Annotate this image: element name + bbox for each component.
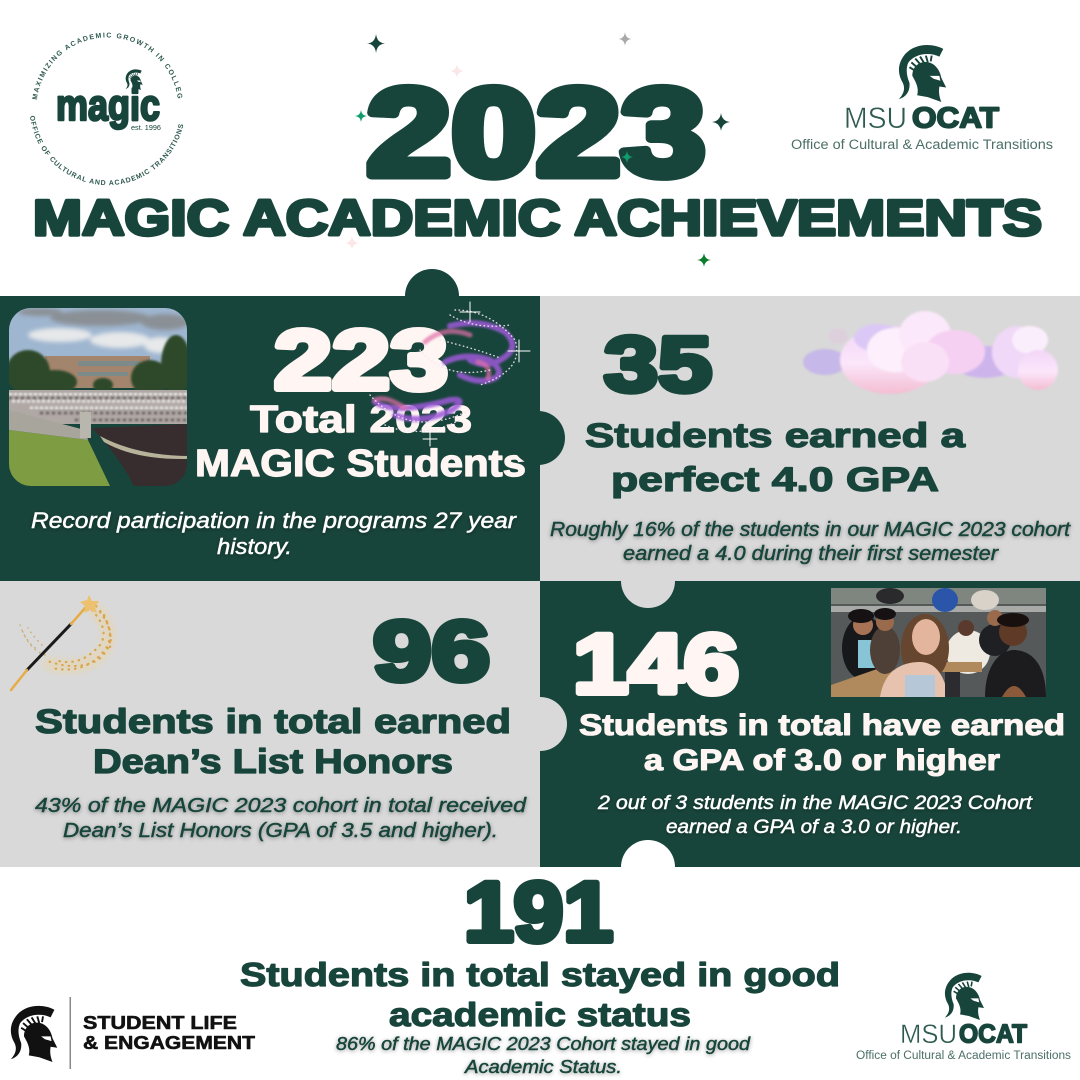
wordmark line 1: STUDENT LIFE (83, 1012, 237, 1033)
panel background (540, 296, 1080, 581)
photo: group of students (6, 308, 191, 486)
small sparkle over the year (621, 151, 633, 163)
heading line 1: Students earned a (585, 417, 966, 455)
MSU OCAT logo bottom (856, 973, 1071, 1062)
title: MAGIC ACADEMIC ACHIEVEMENTS (33, 190, 1042, 246)
panel body text: Record participation in the programs 27 year (31, 508, 518, 533)
section: 191 good academic status (240, 865, 840, 1077)
panel background (540, 581, 1080, 867)
MSU wordmark: MSU (844, 102, 907, 135)
big number 146: 146 (573, 617, 739, 711)
helmet icon (945, 973, 984, 1020)
cloud illustration (803, 311, 1058, 394)
puzzle notches (540, 581, 675, 867)
big number 96: 96 (373, 604, 490, 698)
panel background (0, 581, 540, 867)
logo helmet (126, 69, 143, 90)
panel: 223 total students (0, 269, 540, 581)
OCAT wordmark: OCAT (959, 1018, 1027, 1048)
wordmark line 2: & ENGAGEMENT (83, 1032, 256, 1053)
panel body text (550, 519, 1072, 565)
heading line 1: Students in total have earned (579, 709, 1065, 742)
heading line 1: Students in total earned (35, 703, 511, 741)
panel body text (597, 792, 1034, 838)
wand star (80, 595, 99, 613)
panel body text: Roughly 16% of the students in our MAGIC 2023 cohort (550, 519, 1072, 541)
body text: 86% of the MAGIC 2023 Cohort stayed in good (336, 1034, 751, 1054)
MAGIC circular logo (30, 32, 184, 186)
magic wordmark: magic (56, 81, 160, 130)
panel body text: Dean’s List Honors (GPA of 3.5 and higher). (63, 819, 498, 842)
helmet icon (11, 1006, 57, 1062)
MSU OCAT logo top (791, 45, 1053, 152)
heading line 1: Students in total stayed in good (240, 956, 840, 993)
panel: 35 perfect GPA (511, 296, 1080, 581)
panel body text: 2 out of 3 students in the MAGIC 2023 Cohort (597, 792, 1034, 814)
photo: seated students (831, 588, 1046, 697)
panel body text (31, 508, 518, 559)
Student Life and Engagement logo (11, 997, 256, 1069)
logo ring text bottom: OFFICE OF CULTURAL AND ACADEMIC TRANSITIONS (30, 116, 184, 186)
body text (336, 1034, 751, 1077)
panel body text: history. (217, 534, 292, 559)
big number 223: 223 (274, 313, 448, 407)
magic swirl (370, 302, 530, 446)
panel: 96 Dean's List (0, 581, 540, 867)
big number 191: 191 (464, 865, 613, 959)
OCAT wordmark: OCAT (912, 102, 999, 134)
office caption: Office of Cultural & Academic Transitions (791, 137, 1053, 152)
panel body text (35, 794, 527, 842)
body text: Academic Status. (464, 1057, 622, 1077)
magic wand illustration (11, 606, 111, 690)
panel body text: 43% of the MAGIC 2023 cohort in total received (35, 794, 527, 817)
heading line 2: a GPA of 3.0 or higher (644, 744, 1000, 777)
MSU wordmark: MSU (900, 1019, 957, 1049)
panel body text: earned a GPA of a 3.0 or higher. (666, 816, 962, 838)
title year: 2023 (366, 64, 706, 202)
heading line 2: Dean’s List Honors (93, 743, 453, 781)
heading line 2: academic status (389, 996, 691, 1033)
heading line 2: MAGIC Students (195, 443, 526, 485)
big number 35: 35 (604, 320, 712, 408)
helmet icon (899, 45, 946, 102)
panel background with puzzle tabs (0, 269, 540, 581)
heading line 2: perfect 4.0 GPA (611, 461, 939, 499)
divider (70, 997, 71, 1069)
decorative sparkles (345, 32, 730, 267)
puzzle tab (511, 411, 565, 465)
panel: 146 GPA 3.0 (540, 581, 1080, 867)
office caption: Office of Cultural & Academic Transitions (856, 1050, 1071, 1062)
heading line 1: Total 2023 (250, 399, 472, 441)
est. 1996: est. 1996 (131, 125, 161, 132)
panel body text: earned a 4.0 during their first semester (623, 543, 999, 565)
